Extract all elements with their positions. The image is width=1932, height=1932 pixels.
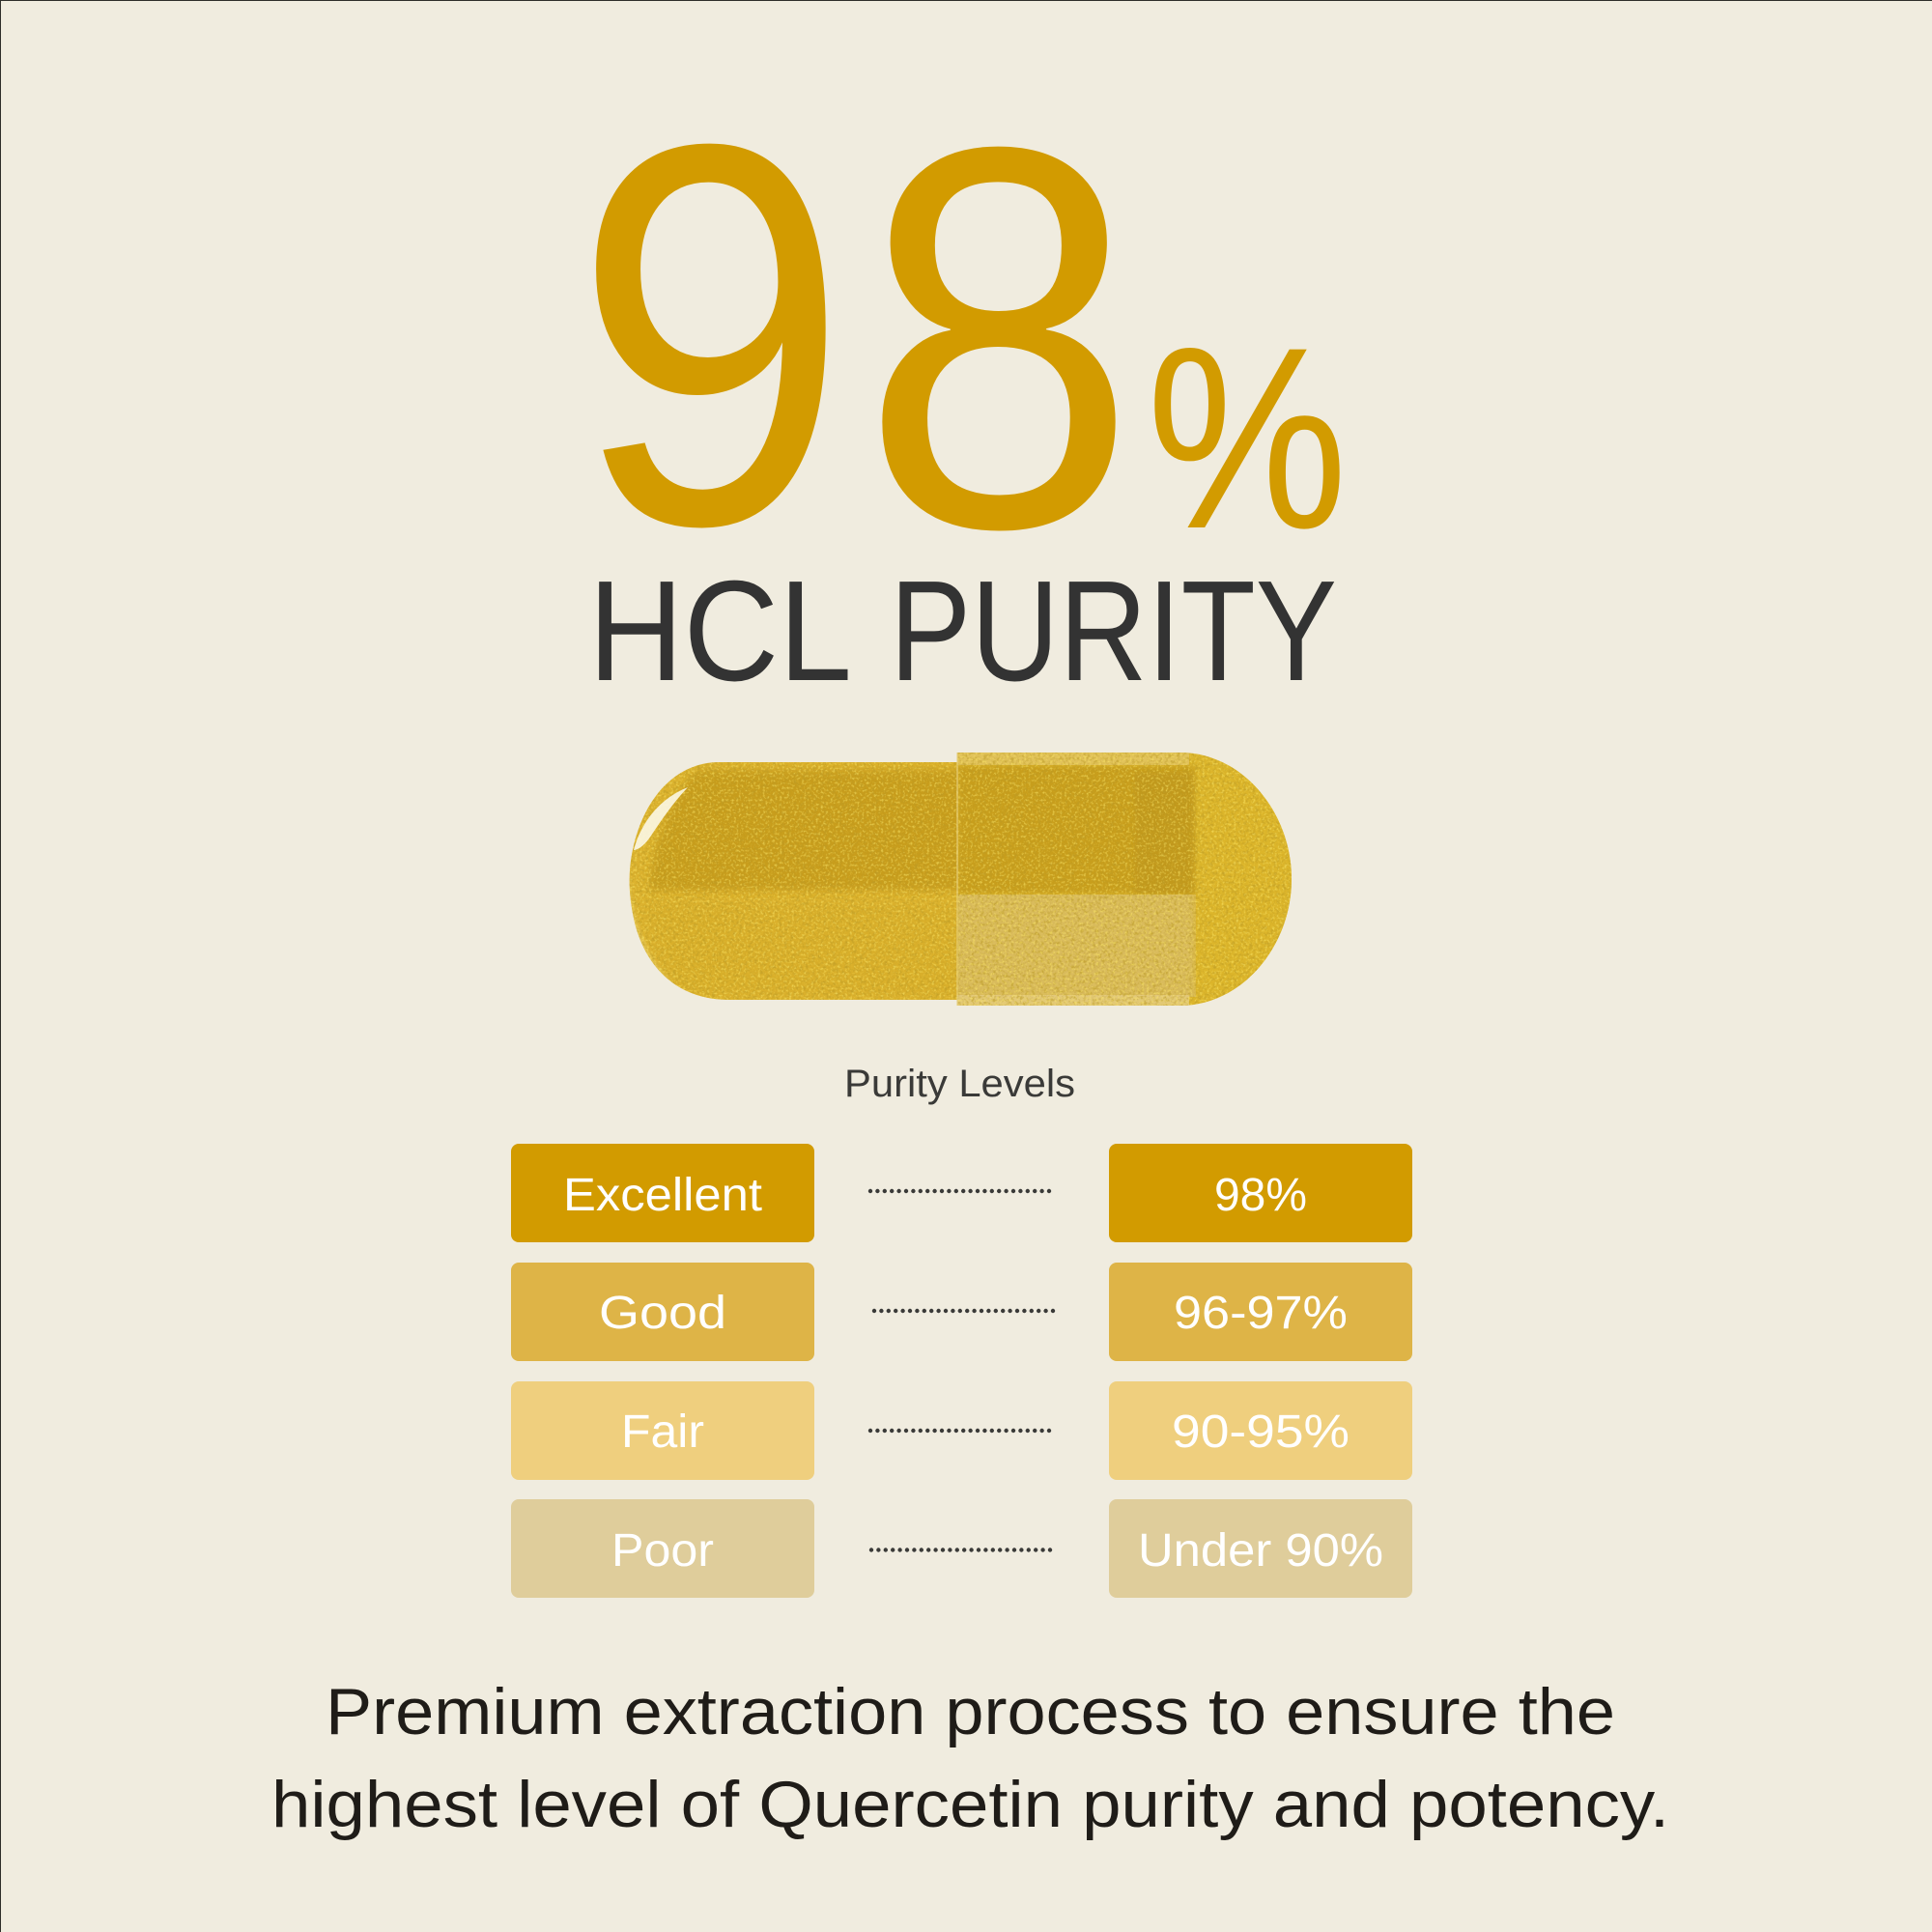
row: Fair label	[511, 1381, 814, 1480]
capsule: seam	[956, 753, 958, 1006]
closing statement: highest level of Quercetin purity and potency.	[271, 1768, 1669, 1841]
row: Good label	[511, 1263, 814, 1361]
big statistic: 98%: 8	[861, 35, 1137, 641]
row: Excellent label	[511, 1144, 814, 1242]
closing statement: Premium extraction process to ensure the	[326, 1675, 1615, 1748]
row: Excellent value: 98%	[1214, 1170, 1307, 1221]
row: Poor label: Poor	[611, 1525, 714, 1577]
row: Poor connector	[871, 1548, 1051, 1552]
row: Good value: 96-97%	[1174, 1288, 1348, 1339]
capsule illustration	[618, 749, 1299, 1009]
big statistic: 98%: %	[1147, 293, 1348, 582]
row: Excellent value	[1109, 1144, 1412, 1242]
big statistic: 98%	[573, 32, 1348, 641]
row: Poor value: Under 90%	[1138, 1525, 1383, 1577]
capsule: left shell	[630, 762, 957, 1000]
row: Excellent label: Excellent	[563, 1170, 762, 1221]
capsule: glossy highlight	[634, 787, 688, 850]
capsule: right shell	[952, 749, 1299, 1009]
row: Fair value	[1109, 1381, 1412, 1480]
row: Poor label	[511, 1499, 814, 1598]
row: Good connector	[874, 1309, 1054, 1313]
row: Poor value	[1109, 1499, 1412, 1598]
row: Good label: Good	[599, 1288, 726, 1339]
purity levels table	[511, 1144, 1412, 1598]
heading: HCL PURITY: HCL	[588, 552, 852, 711]
row: Fair value: 90-95%	[1172, 1406, 1350, 1458]
row: Fair connector	[870, 1429, 1050, 1433]
heading: HCL PURITY: PURITY	[890, 552, 1337, 711]
row: Fair label: Fair	[621, 1406, 704, 1458]
table heading: Purity Levels: Purity Levels	[844, 1063, 1075, 1105]
big statistic: 98%: 9	[573, 32, 849, 639]
row: Excellent connector	[870, 1189, 1050, 1193]
closing statement	[271, 1675, 1669, 1841]
capsule: powder grain	[628, 752, 1294, 1008]
row: Good value	[1109, 1263, 1412, 1361]
heading: HCL PURITY	[588, 552, 1337, 711]
